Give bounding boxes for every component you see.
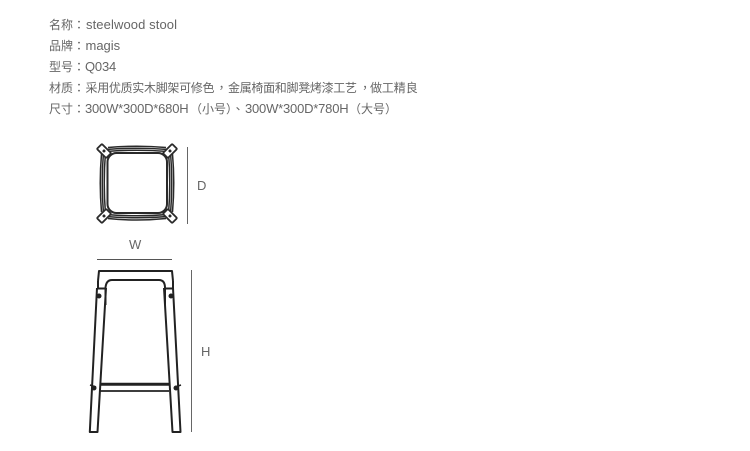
- icon: corner bracket bottom-left: [97, 209, 111, 223]
- depth label: D: [197, 178, 206, 193]
- spec text: material: 材质: [49, 81, 73, 95]
- spec text: dimensions: 300W*300D*780H: [245, 101, 348, 116]
- icon: lower left bolt: [90, 385, 96, 387]
- icon: corner bracket bottom-right: [163, 209, 177, 223]
- spec text: name: 名称: [49, 18, 73, 32]
- spec text: dimensions: 、: [232, 102, 244, 116]
- spec text: name: ：: [73, 18, 85, 32]
- spec text: brand: ：: [73, 39, 85, 53]
- depth dimension line: [186, 147, 188, 224]
- spec text: dimensions: （: [190, 102, 202, 116]
- spec text: material: ：: [73, 81, 85, 95]
- spec text: material: 采用优质实木脚架可修色: [86, 81, 214, 95]
- width label: W: [129, 237, 142, 252]
- spec text: material: 做工精良: [370, 81, 418, 95]
- icon: lower left bolt head: [92, 386, 96, 390]
- spec text: material: [49, 81, 418, 95]
- spec text: dimensions: 大号: [361, 102, 385, 116]
- spec text: name: steelwood stool: [86, 17, 177, 32]
- spec text: model: [49, 59, 116, 74]
- icon: upper left bolt: [96, 294, 102, 298]
- spec text: model: Q034: [85, 59, 116, 74]
- spec text: dimensions: （: [349, 102, 361, 116]
- icon: corner bracket top-right: [163, 144, 177, 158]
- icon: upper right bolt: [168, 294, 174, 298]
- spec text: dimensions: 尺寸: [49, 102, 73, 116]
- side view of stool: [90, 271, 181, 432]
- icon: lower right bolt head: [174, 386, 178, 390]
- icon: lower right bolt: [175, 385, 181, 387]
- icon: corner bracket top-left: [97, 144, 111, 158]
- spec text: dimensions: ）: [385, 102, 397, 116]
- spec text: dimensions: [49, 101, 397, 116]
- top view of stool: [97, 144, 177, 223]
- spec text: dimensions: 小号: [202, 102, 226, 116]
- height label: H: [201, 344, 210, 359]
- spec text: dimensions: ）: [226, 102, 238, 116]
- spec text: material: ，: [216, 81, 228, 95]
- spec text: material: ，: [359, 81, 371, 95]
- spec text: model: ：: [73, 60, 85, 74]
- spec text: brand: magis: [86, 38, 120, 53]
- spec text: brand: 品牌: [49, 39, 73, 53]
- spec text: dimensions: 300W*300D*680H: [85, 101, 188, 116]
- height dimension line: [190, 270, 192, 432]
- spec text: model: 型号: [49, 60, 73, 74]
- spec text: brand: [49, 38, 120, 53]
- width dimension line: [97, 258, 172, 260]
- spec text: dimensions: ：: [73, 102, 85, 116]
- spec text: material: 金属椅面和脚凳烤漆工艺: [228, 81, 357, 95]
